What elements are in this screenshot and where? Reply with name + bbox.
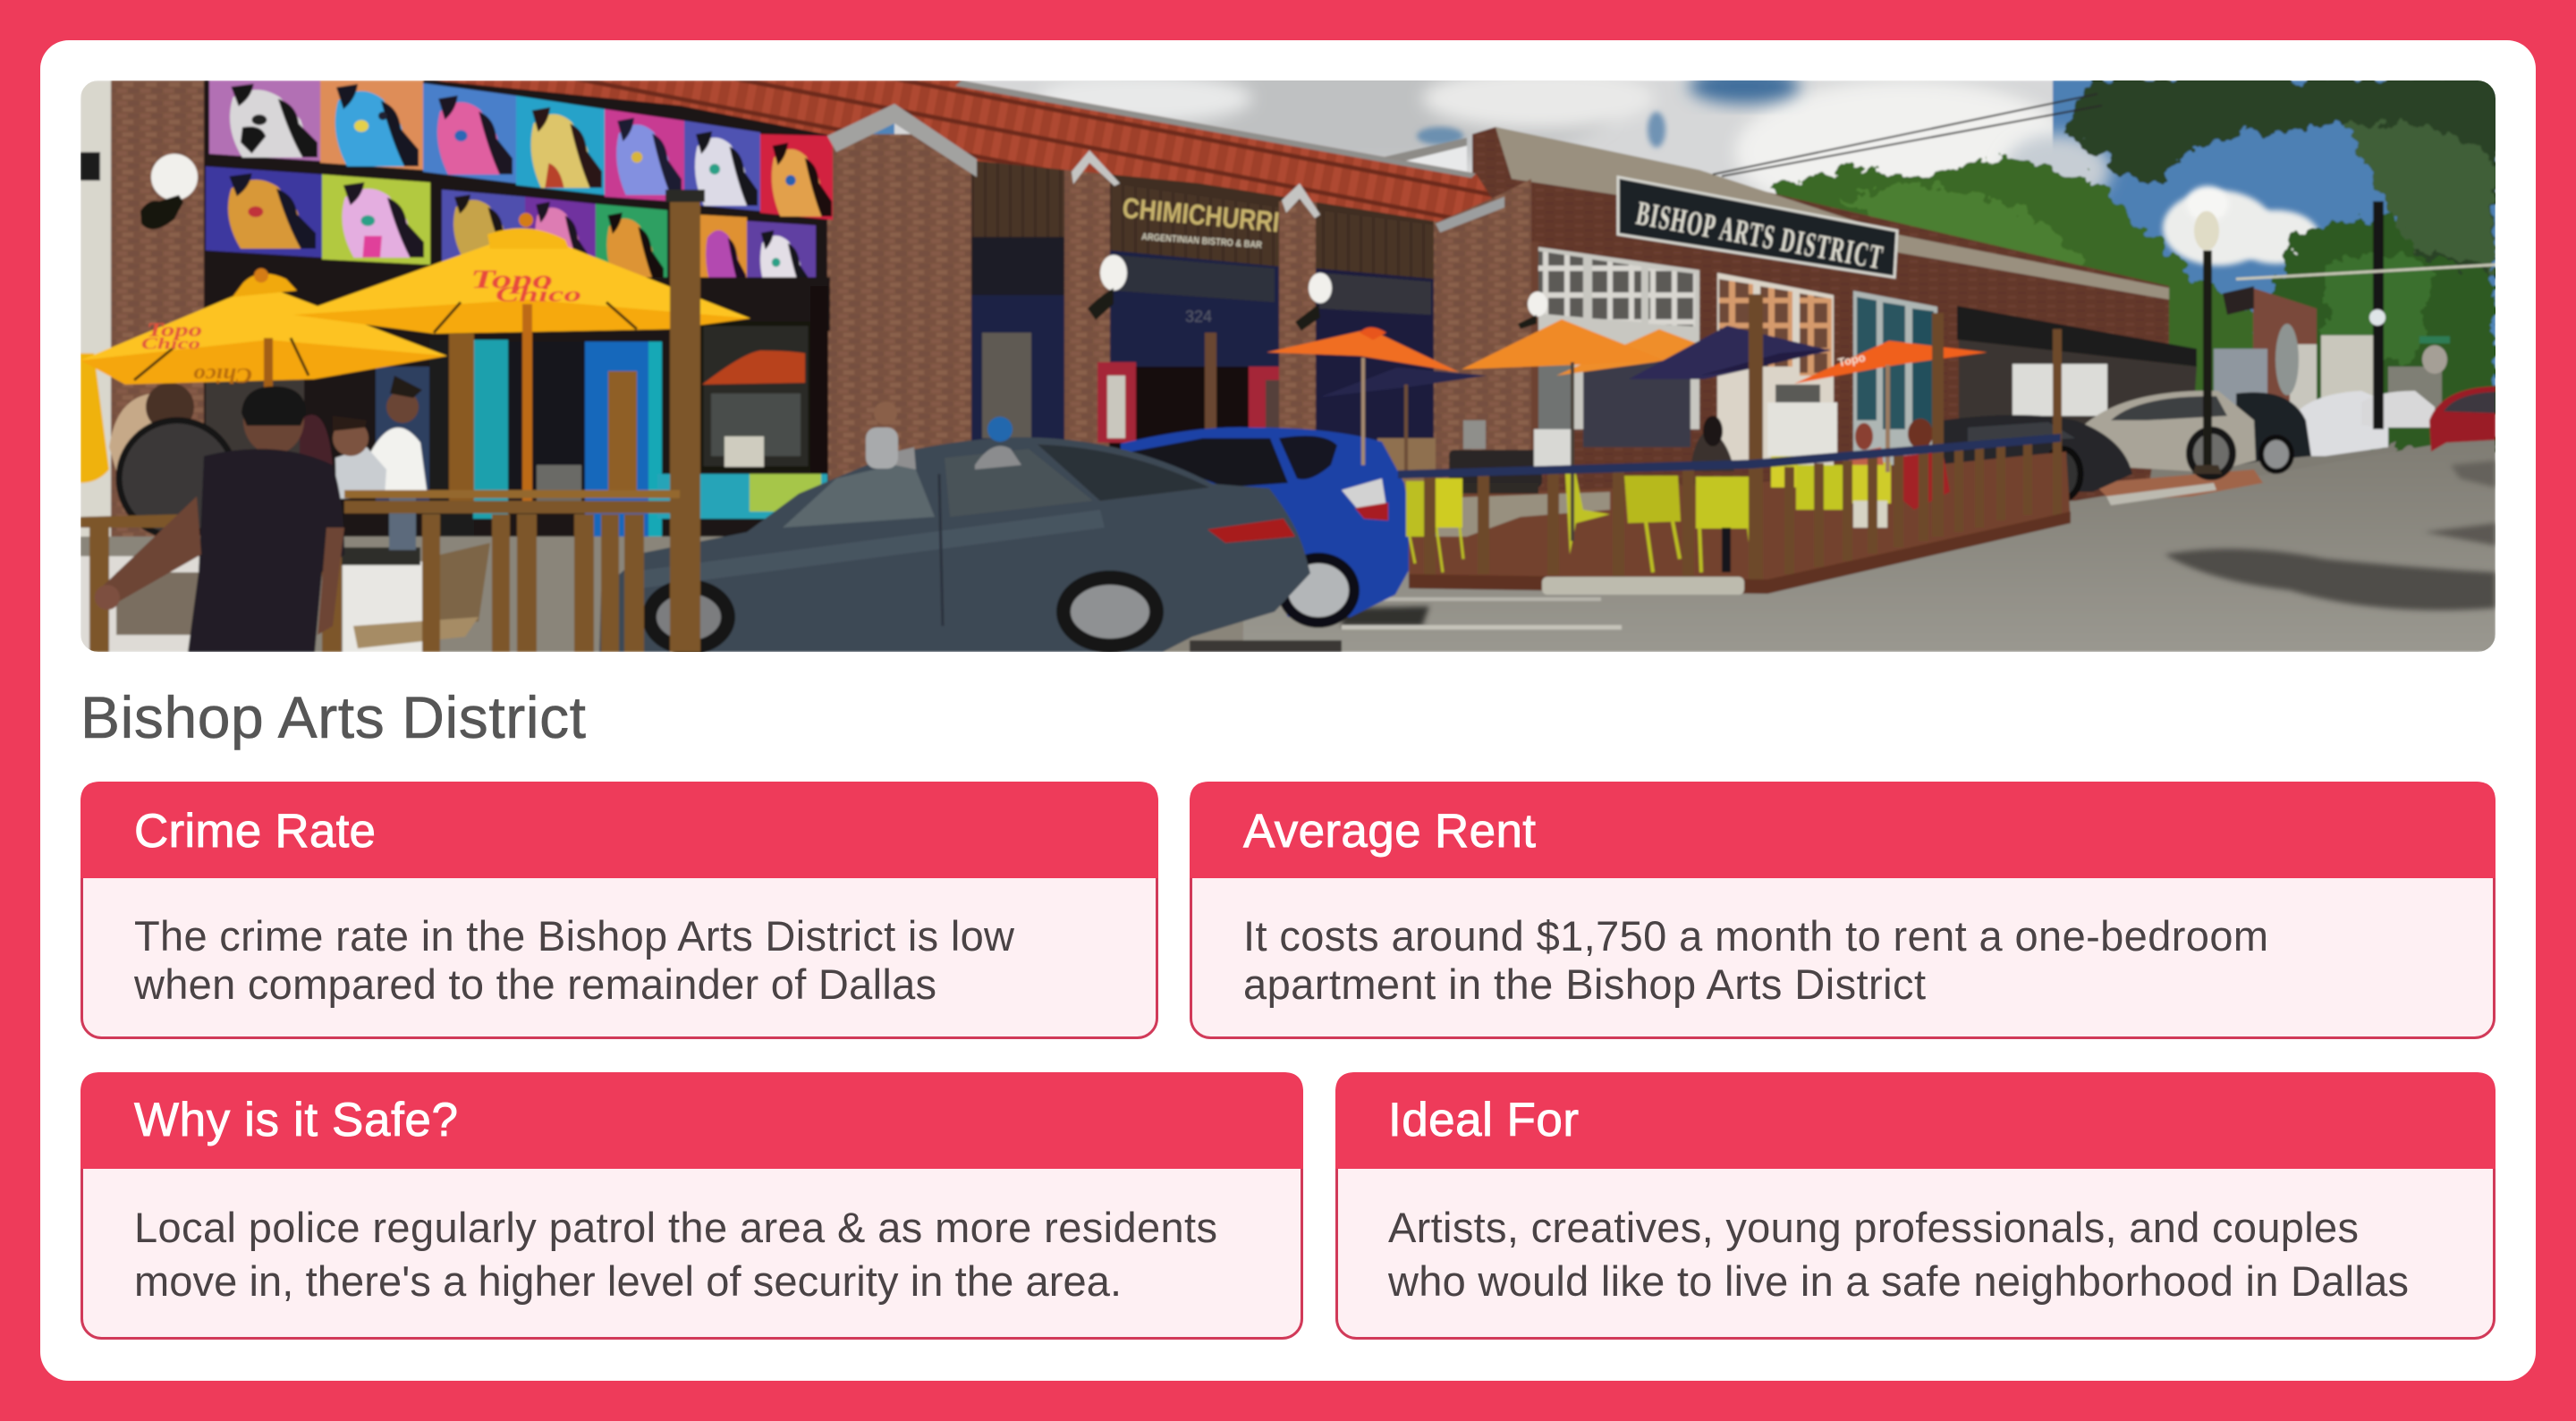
outdoor patio deck and chairs: [1406, 402, 2071, 592]
sign: Bishop Arts District: [1618, 177, 1897, 277]
parked cars far down the street: [1943, 386, 2496, 499]
storefront bays: wood panels and navy doors: [971, 152, 1538, 501]
mural wall base and left column: [80, 80, 975, 581]
trees behind buildings: [1767, 76, 2504, 456]
card: Average Rent: apartment in the Bishop Arts District: [1243, 960, 1926, 1008]
distant buildings and storefronts: [2214, 286, 2442, 411]
patio umbrellas: [1267, 319, 1987, 541]
card: Crime Rate: [80, 782, 1158, 1037]
card: Why is it Safe?: Local police regularly patrol the area & as more residents: [134, 1204, 1217, 1251]
photo: Bishop Arts District street scene: [80, 58, 2504, 652]
sign: Chimichurri: ARGENTINIAN BISTRO & BAR: [1141, 232, 1262, 250]
card: Why is it Safe?: [80, 1072, 1303, 1338]
grey sedan: [599, 437, 1310, 652]
card: Why is it Safe?: move in, there's a higher level of security in the area.: [134, 1257, 1122, 1305]
card: Crime Rate: The crime rate in the Bishop Arts District is low: [134, 912, 1015, 960]
card: Why is it Safe?: Why is it Safe?: [134, 1094, 458, 1146]
yellow umbrellas: Chico: [193, 363, 252, 386]
sign: Bishop Arts District: BISHOP ARTS DISTRICT: [1633, 195, 1886, 277]
card: Average Rent: Average Rent: [1243, 805, 1536, 858]
card: Crime Rate: Crime Rate: [134, 805, 376, 858]
yellow umbrellas: Topo: [147, 318, 202, 341]
card: Ideal For: who would like to live in a safe neighborhood in Dallas: [1387, 1257, 2409, 1305]
left side table and people: [80, 376, 1021, 652]
building: brick storefront with old parapet: [1382, 127, 2169, 501]
sign: Chimichurri: [1121, 191, 1281, 326]
pop-art dog mural: [206, 80, 833, 293]
sign: Chimichurri: CHIMICHURRI: [1121, 191, 1281, 239]
card: Ideal For: [1335, 1072, 2496, 1338]
road and pavement: [80, 434, 2496, 652]
card: Crime Rate: when compared to the remainder of Dallas: [133, 960, 936, 1008]
yellow umbrellas: Chico: [496, 283, 581, 307]
man in black t-shirt: [95, 386, 344, 652]
yellow umbrellas: Chico: [141, 334, 200, 352]
red tile roof with gable trim: [434, 80, 1492, 222]
yellow umbrellas: [80, 213, 750, 503]
card: Average Rent: It costs around $1,750 a month to rent a one-bedroom: [1243, 912, 2268, 960]
overhead wires: [1713, 94, 2496, 279]
card: Ideal For: Artists, creatives, young professionals, and couples: [1388, 1204, 2359, 1251]
patio fence: [1398, 294, 2071, 595]
yellow umbrellas: Topo: [470, 265, 553, 294]
foreground wooden fence: [80, 190, 705, 652]
location title: Bishop Arts District: [80, 684, 586, 750]
sky with clouds: [873, 80, 2496, 503]
patio umbrellas: Topo: [1837, 351, 1867, 369]
sign: Chimichurri: 324: [1185, 308, 1212, 326]
wall lamps: [80, 152, 1547, 331]
card: Average Rent: [1190, 782, 2496, 1037]
card: Ideal For: Ideal For: [1388, 1094, 1579, 1146]
street lamp post: [2192, 201, 2450, 474]
blue hatchback: [1121, 427, 1418, 622]
mural-store windows and doors: [204, 277, 830, 554]
building windows: [1531, 246, 2197, 465]
